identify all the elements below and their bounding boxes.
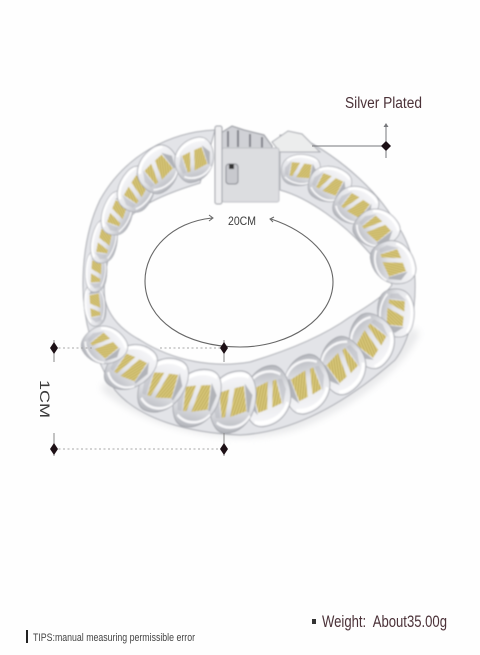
weight text: Weight: About35.00g (322, 613, 447, 631)
clasp bar (215, 126, 222, 204)
arrow heads (209, 215, 274, 222)
markers (50, 342, 228, 455)
label: 20CM: 20CM (228, 216, 256, 228)
measurement ticks (54, 340, 224, 456)
clasp plate (222, 148, 279, 202)
annotation: silver plated (312, 95, 422, 158)
tips text: TIPS:manual measuring permissible error (33, 632, 195, 644)
clasp (215, 126, 320, 204)
bracelet shadow (104, 330, 415, 432)
label: 1CM: 1CM (37, 380, 53, 418)
oval arrow right (240, 219, 333, 347)
tips bar (26, 630, 28, 643)
bracelet (76, 126, 421, 435)
annotation: width 1CM (37, 340, 228, 456)
chain links bottom (76, 306, 406, 433)
chain links right (277, 148, 421, 340)
weight note (312, 613, 447, 631)
oval arrow left (145, 218, 240, 347)
bracelet base band (83, 130, 415, 435)
label: silver plated: Silver Plated (345, 95, 422, 112)
bullet (312, 619, 316, 624)
leader line (312, 124, 386, 158)
chain links left (81, 135, 218, 327)
annotation: circumference (145, 215, 333, 347)
dotted lines (54, 348, 224, 449)
clasp button (226, 164, 238, 184)
